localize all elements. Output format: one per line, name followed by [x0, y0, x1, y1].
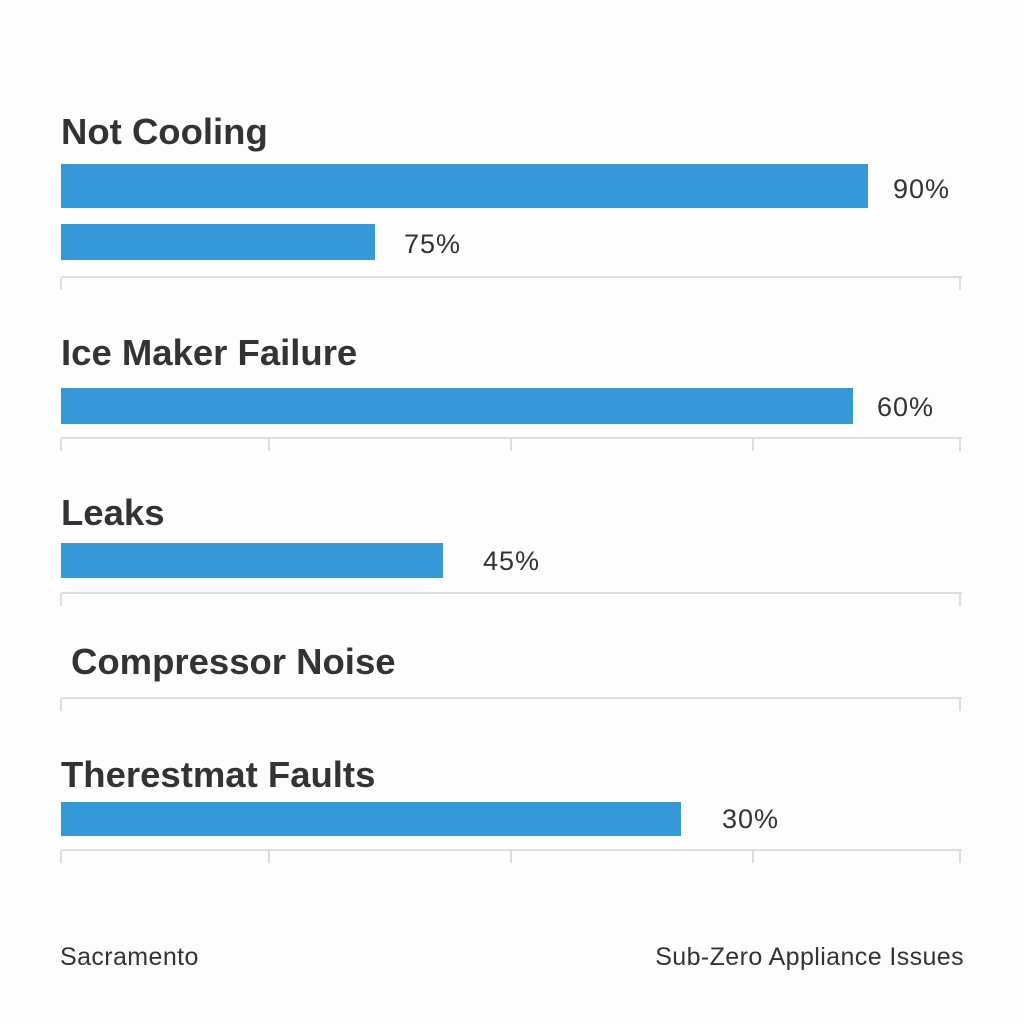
- value: 45%: 45%: [483, 546, 540, 576]
- axis 1: [61, 276, 962, 291]
- value: 90%: 90%: [893, 174, 950, 204]
- bar: 30%: [61, 802, 681, 836]
- bar: 75%: [61, 224, 375, 260]
- footer: location: Sacramento: [60, 943, 199, 971]
- bar: 60%: [61, 388, 853, 424]
- axis 2: [61, 437, 962, 452]
- axis 5: [61, 849, 962, 864]
- value: 30%: 30%: [722, 804, 779, 834]
- heading: Not Cooling: Not Cooling: [61, 111, 268, 152]
- heading: Therestmat Faults: Therestmat Faults: [61, 754, 375, 795]
- axis 4: [61, 697, 962, 712]
- value: 60%: 60%: [877, 392, 934, 422]
- value: 75%: 75%: [404, 229, 461, 259]
- bar: 90%: [61, 164, 868, 208]
- heading: Compressor Noise: Compressor Noise: [71, 641, 396, 682]
- heading: Ice Maker Failure: Ice Maker Failure: [61, 332, 357, 373]
- axis 3: [61, 592, 962, 607]
- heading: Leaks: Leaks: [61, 492, 164, 533]
- footer: title: Sub-Zero Appliance Issues: [655, 943, 964, 971]
- bar: 45%: [61, 543, 443, 578]
